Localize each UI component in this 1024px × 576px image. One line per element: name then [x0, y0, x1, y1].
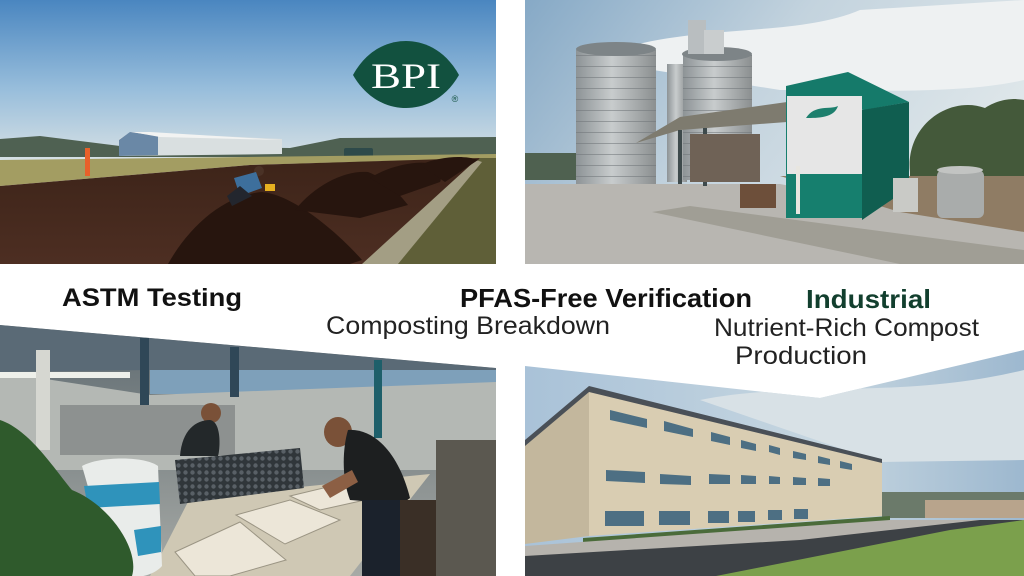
right verge [385, 158, 496, 264]
soil ground [0, 158, 480, 264]
panel: factory building photo [525, 340, 1024, 576]
rear silo [667, 64, 687, 182]
trays [175, 484, 365, 576]
panel: silos and facility photo [525, 0, 1024, 264]
grey tank [937, 166, 984, 218]
left trees [525, 153, 580, 180]
dark crates [400, 500, 436, 576]
right trees [910, 99, 1024, 180]
right worker [322, 417, 410, 576]
window rows [605, 410, 852, 526]
green plants [0, 420, 133, 576]
worker [227, 166, 275, 206]
parked van [344, 148, 373, 162]
kerb [652, 206, 1024, 264]
text: Production: Production [735, 342, 867, 370]
hedge [583, 516, 890, 542]
silo two [682, 20, 752, 180]
clouds [700, 370, 1024, 462]
orange marker post [85, 148, 90, 176]
heading: ASTM Testing: ASTM Testing [62, 284, 242, 312]
compost piles [168, 157, 478, 264]
pavement [525, 520, 979, 556]
logo: BPI: ® [452, 94, 459, 104]
back wall [0, 372, 496, 470]
ceiling lights [0, 372, 130, 378]
green container building [786, 72, 909, 220]
logo: BPI [353, 41, 459, 108]
steel columns [140, 338, 149, 405]
text: Composting Breakdown: Composting Breakdown [326, 312, 610, 340]
logo: BPI: BPI [371, 56, 441, 96]
dark bottle rack [175, 448, 304, 504]
grass [716, 520, 1024, 576]
clouds [590, 0, 1024, 91]
distant tree line [0, 136, 496, 157]
white and teal bucket [82, 458, 162, 576]
road [525, 520, 1024, 576]
panel: lab workshop photo [0, 320, 496, 576]
heading: Industrial: Industrial [806, 284, 931, 314]
ground [525, 184, 1024, 264]
workbench [150, 474, 430, 576]
concrete edge [362, 160, 482, 264]
left worker [180, 403, 221, 456]
air conditioning unit [893, 178, 918, 212]
heading: PFAS-Free Verification: PFAS-Free Verification [460, 283, 752, 313]
grass strip [0, 154, 496, 186]
white barn [119, 132, 282, 156]
silo one [576, 42, 656, 184]
roof trusses [0, 325, 496, 372]
canopy [636, 102, 787, 208]
sky [0, 0, 496, 160]
distant trees and buildings [882, 492, 1024, 518]
panel: compost field photo [0, 0, 496, 264]
building side [525, 386, 882, 544]
background machinery [60, 405, 235, 455]
text: Nutrient-Rich Compost: Nutrient-Rich Compost [714, 314, 979, 342]
